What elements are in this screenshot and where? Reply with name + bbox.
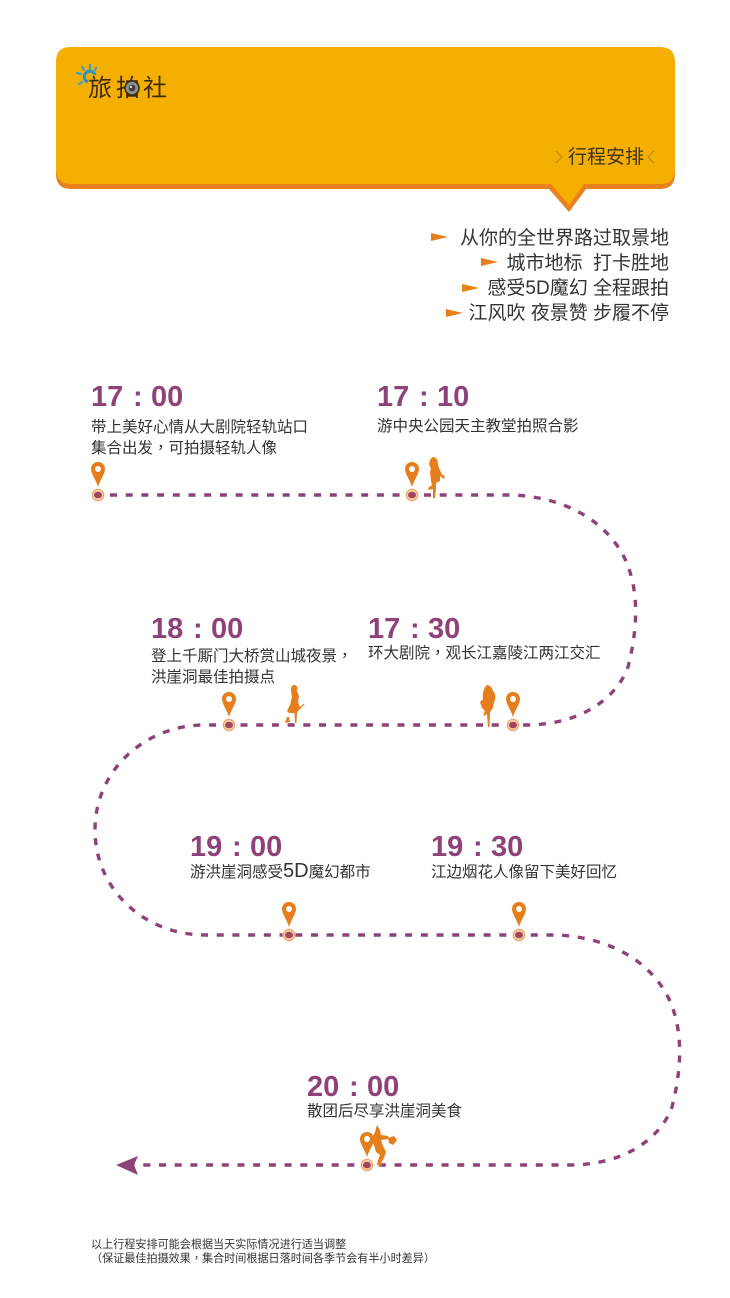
- intro bullet list: 从你的全世界路过取景地: [460, 227, 669, 249]
- stop 17:00: 集合出发，可拍摄轻轨人像: [91, 436, 278, 458]
- banner label: 行程安排: [568, 146, 644, 168]
- stop 20:00: 00: [367, 1071, 399, 1103]
- stop 17:30: 17: [368, 613, 400, 645]
- stop 19:00: 19: [190, 831, 222, 863]
- stop 19:00: 游洪崖洞感受5D魔幻都市: [190, 860, 371, 882]
- stop 17:00: :: [133, 381, 143, 413]
- stop 17:30: 30: [428, 613, 460, 645]
- intro bullet list: 城市地标 打卡胜地: [506, 252, 669, 274]
- figure near 18:00: [285, 685, 304, 723]
- stop 17:00: [91, 381, 308, 502]
- stop 19:30: 30: [491, 831, 523, 863]
- stop 17:30: 环大剧院，观长江嘉陵江两江交汇: [368, 641, 601, 663]
- stop 17:00: 00: [151, 381, 183, 413]
- figure near 17:10: [428, 457, 445, 498]
- logo: 旅拍社: 社: [143, 75, 167, 102]
- stop 19:00: [190, 831, 371, 942]
- intro bullet list: 感受5D魔幻 全程跟拍: [487, 277, 669, 299]
- stop 19:30: [431, 831, 617, 942]
- stop 17:10: 17: [377, 381, 409, 413]
- figure near 20:00: [372, 1125, 397, 1166]
- header banner: [56, 47, 675, 212]
- stop 17:10: [377, 381, 579, 502]
- footnote: 以上行程安排可能会根据当天实际情况进行适当调整: [91, 1237, 346, 1251]
- stop 18:00: 登上千厮门大桥赏山城夜景，: [151, 644, 353, 666]
- logo: 旅拍社: 旅: [88, 75, 112, 102]
- stop 17:30: [368, 613, 601, 732]
- stop 17:10: :: [419, 381, 429, 413]
- stop 20:00: 20: [307, 1071, 339, 1103]
- stop 18:00: 洪崖洞最佳拍摄点: [151, 668, 275, 686]
- figure near 17:30: [480, 685, 495, 727]
- stop 19:30: 江边烟花人像留下美好回忆: [431, 863, 617, 881]
- footnote: （保证最佳拍摄效果，集合时间根据日落时间各季节会有半小时差异）: [91, 1250, 435, 1266]
- stop 17:00: 带上美好心情从大剧院轻轨站口: [91, 417, 308, 436]
- arrowhead: [116, 1156, 138, 1175]
- stop 19:30: :: [473, 831, 483, 863]
- stop 18:00: [151, 613, 353, 732]
- stop 18:00: 18: [151, 613, 183, 645]
- stop 17:00: 17: [91, 381, 123, 413]
- logo: 旅拍社: [77, 65, 167, 102]
- stop 17:30: :: [410, 613, 420, 645]
- stop 19:30: 19: [431, 831, 463, 863]
- footnote: [91, 1237, 435, 1266]
- stop 18:00: :: [193, 613, 203, 645]
- stop 19:00: :: [232, 831, 242, 863]
- stop 18:00: 00: [211, 613, 243, 645]
- intro bullet list: 江风吹 夜景赞 步履不停: [468, 302, 669, 324]
- stop 19:00: 00: [250, 831, 282, 863]
- stop 17:10: 游中央公园天主教堂拍照合影: [377, 417, 579, 435]
- route line: [95, 495, 680, 1175]
- logo: 旅拍社: 拍: [116, 75, 140, 102]
- stop 17:10: 10: [437, 381, 469, 413]
- stop 20:00: 散团后尽享洪崖洞美食: [307, 1102, 463, 1120]
- intro bullet list: [431, 227, 669, 324]
- stop 20:00: [307, 1071, 463, 1172]
- stop 20:00: :: [349, 1071, 359, 1103]
